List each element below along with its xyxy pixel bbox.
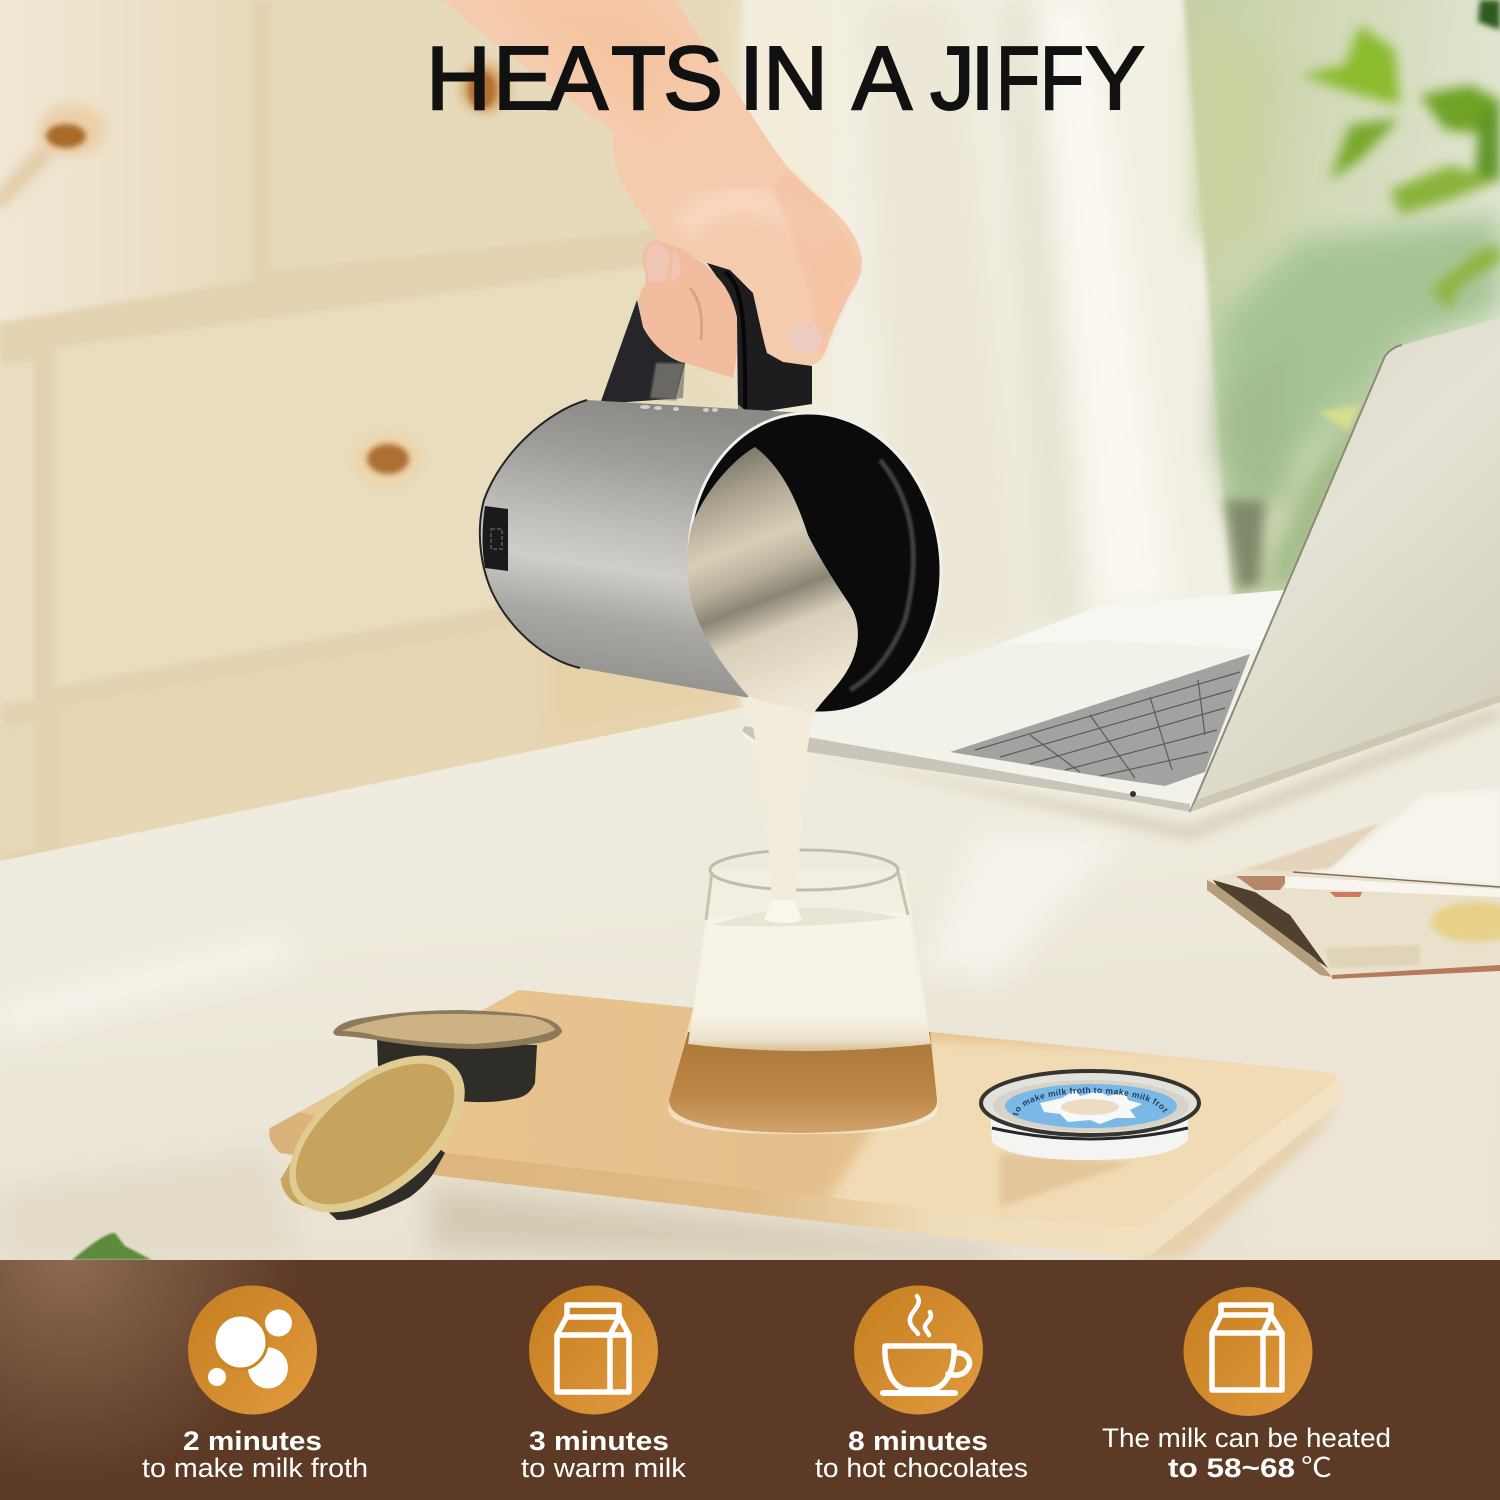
lower sheet: [1207, 870, 1500, 976]
hand holding the handle: [433, 0, 862, 378]
title: HEATS: [426, 29, 723, 129]
label: to make milk froth: to make milk froth: [142, 1453, 368, 1483]
table surface: [0, 550, 1500, 1270]
label: to 58~68 degrees: ℃: [1301, 1453, 1332, 1483]
lid ring text: to make milk froth to make milk froth to make milk: [1012, 1086, 1168, 1116]
background: blurred room with cabinet, curtain and plant: [0, 0, 1500, 900]
folded newspaper: [1207, 790, 1500, 979]
stat: temperature: [1102, 1287, 1391, 1483]
board top: [300, 990, 1336, 1227]
glass of layered milk and coffee: [668, 850, 938, 1134]
shadow on the table: [1133, 1100, 1342, 1258]
laptop: [742, 318, 1500, 840]
garden and plant: [1183, 0, 1500, 640]
cabinet knobs: [0, 64, 509, 487]
label: The milk can be heated: The milk can be heated: [1102, 1423, 1391, 1453]
wooden serving board: [269, 980, 1360, 1258]
milk splash: [1040, 1090, 1142, 1124]
inner wall and milk: [687, 447, 858, 714]
milk stream: [748, 696, 813, 915]
food capsules: [261, 1010, 562, 1243]
top sheet, blown out by sunlight: [1293, 790, 1500, 886]
icon: steaming cup: [854, 1286, 983, 1414]
capsule: leaning: [261, 1025, 493, 1243]
pitcher mouth: [668, 395, 962, 731]
label: to warm milk: to warm milk: [521, 1453, 687, 1483]
bottom info panel: [0, 1260, 1500, 1500]
title: Y: [1085, 29, 1145, 129]
capsule: sealed, standing: [333, 1010, 562, 1102]
icon: milk carton: [1184, 1287, 1312, 1416]
thumbnail: [788, 323, 822, 353]
pitcher: stainless body, handle and pour: [480, 263, 962, 923]
label: 2 minutes: 2 minutes: [183, 1426, 322, 1456]
label: to 58~68 degrees: [1168, 1453, 1332, 1483]
power switch: [482, 506, 508, 571]
small mint leaf: [72, 1233, 152, 1260]
curtain: [742, 0, 1236, 720]
laptop screen back: [1190, 318, 1500, 812]
title: A: [852, 29, 912, 129]
board edge: [269, 990, 1343, 1257]
label: to 58~68 degrees: to 58~68: [1168, 1453, 1295, 1483]
label: to hot chocolates: to hot chocolates: [815, 1453, 1028, 1483]
stat: milk froth: [142, 1286, 368, 1483]
icon: bubbles: [188, 1286, 317, 1414]
stat: warm milk: [521, 1286, 687, 1483]
handle: [600, 263, 812, 418]
control buttons: [640, 405, 718, 412]
title: FF: [996, 29, 1084, 129]
title: IN: [739, 29, 828, 129]
title: JI: [930, 29, 995, 129]
body: [480, 400, 815, 698]
label: 3 minutes: 3 minutes: [529, 1426, 669, 1456]
title: [426, 29, 1145, 129]
keyboard: [950, 654, 1250, 786]
stat: hot chocolates: [815, 1286, 1028, 1483]
soft sunlight and shadows on table: [0, 830, 1500, 1262]
label: 8 minutes: 8 minutes: [848, 1426, 988, 1456]
curled fingers: [638, 240, 738, 378]
folded spine: [1213, 880, 1328, 968]
milk lid with blue label: [979, 1069, 1201, 1160]
icon: milk carton: [529, 1286, 658, 1414]
